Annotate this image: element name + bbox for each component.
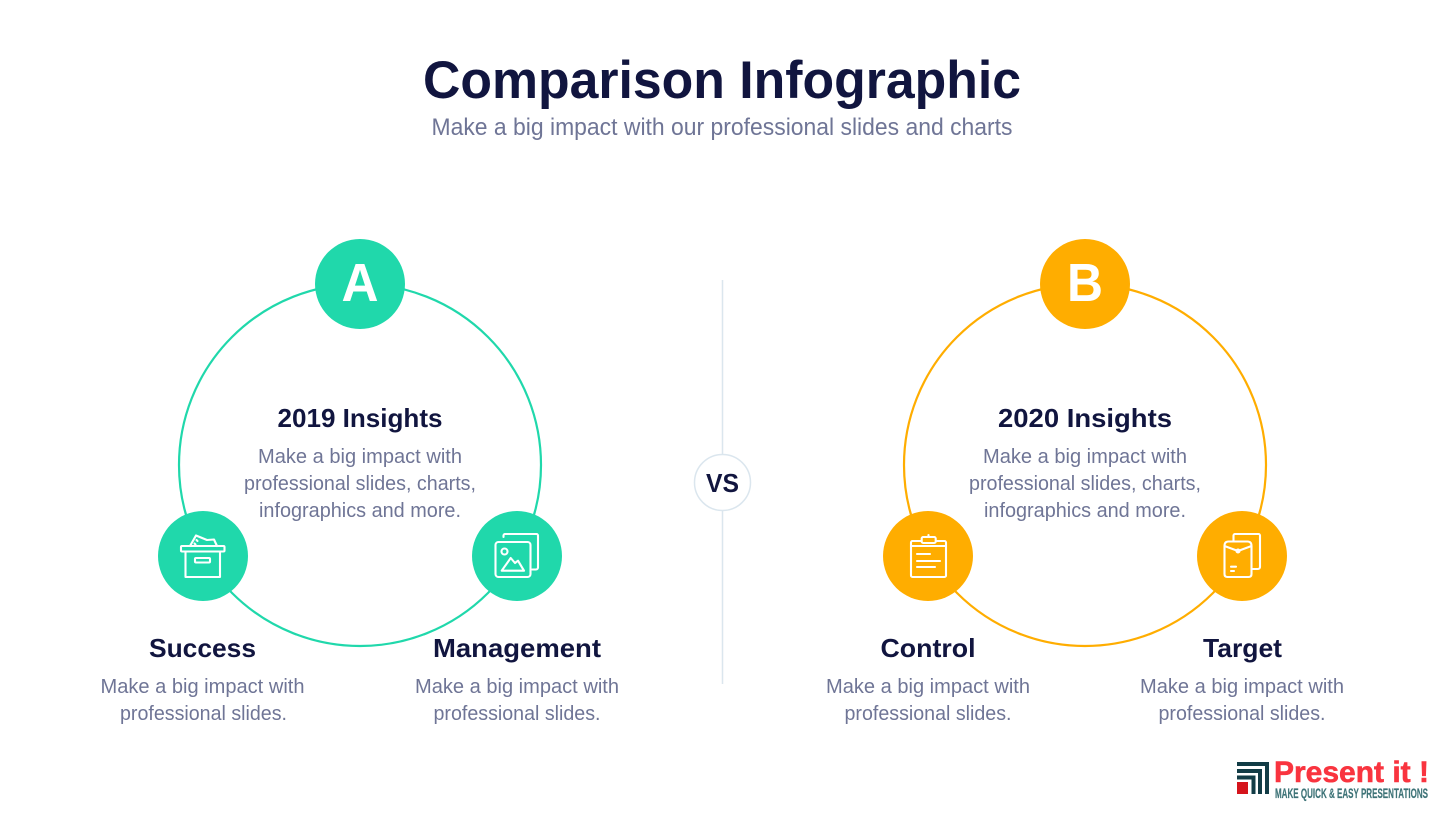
badge B bbox=[1040, 239, 1130, 329]
label: Control: Make a big impact with bbox=[826, 676, 1030, 698]
label: Management: Management bbox=[433, 633, 601, 663]
label: Management: professional slides. bbox=[434, 703, 600, 725]
heading: 2019 Insights: 2019 Insights bbox=[278, 403, 442, 433]
label: Success: professional slides. bbox=[120, 703, 287, 725]
label: Success: Make a big impact with bbox=[100, 676, 304, 698]
panel: A 2019 bbox=[100, 239, 619, 725]
text block: 2019 description bbox=[244, 446, 476, 522]
icon: image gallery bbox=[472, 511, 562, 601]
icon: clipboard bbox=[883, 511, 973, 601]
panel: B 2020 bbox=[826, 239, 1344, 725]
badge B: B bbox=[1067, 254, 1103, 313]
label: Target: Target bbox=[1203, 633, 1282, 663]
badge A bbox=[315, 239, 405, 329]
ring B bbox=[904, 284, 1266, 646]
text block: 2020 description: infographics and more. bbox=[984, 500, 1186, 522]
label: Management bbox=[415, 633, 619, 725]
title: Comparison Infographic bbox=[423, 51, 1021, 110]
label: Target: professional slides. bbox=[1158, 703, 1326, 725]
label: Target: Make a big impact with bbox=[1140, 676, 1344, 698]
logo wordmark: Present it ! bbox=[1274, 756, 1429, 789]
label: Control: Control bbox=[880, 633, 976, 663]
label: Target bbox=[1140, 633, 1344, 725]
text block: 2020 description bbox=[969, 446, 1201, 522]
label: Success: Success bbox=[149, 633, 256, 663]
label: Success bbox=[100, 633, 304, 725]
text block: 2020 description: professional slides, charts, bbox=[969, 473, 1201, 495]
divider with VS badge bbox=[694, 280, 750, 684]
text block: 2019 description: professional slides, charts, bbox=[244, 473, 476, 495]
ring A bbox=[179, 284, 541, 646]
heading: 2020 Insights: 2020 Insights bbox=[998, 403, 1172, 433]
icon: envelope folder bbox=[1197, 511, 1287, 601]
divider with VS badge: VS bbox=[706, 468, 739, 498]
badge A: A bbox=[342, 254, 378, 313]
text block: 2020 description: Make a big impact with bbox=[983, 446, 1187, 468]
icon: archive box bbox=[158, 511, 248, 601]
icon: logo mark bbox=[1237, 764, 1267, 794]
subtitle: Make a big impact with our professional slides and charts bbox=[432, 114, 1012, 141]
label: Management: Make a big impact with bbox=[415, 676, 619, 698]
label: Control bbox=[826, 633, 1030, 725]
label: Control: professional slides. bbox=[844, 703, 1012, 725]
logo: Present it bbox=[1237, 756, 1429, 801]
text block: 2019 description: infographics and more. bbox=[259, 500, 461, 522]
text block: 2019 description: Make a big impact with bbox=[258, 446, 462, 468]
